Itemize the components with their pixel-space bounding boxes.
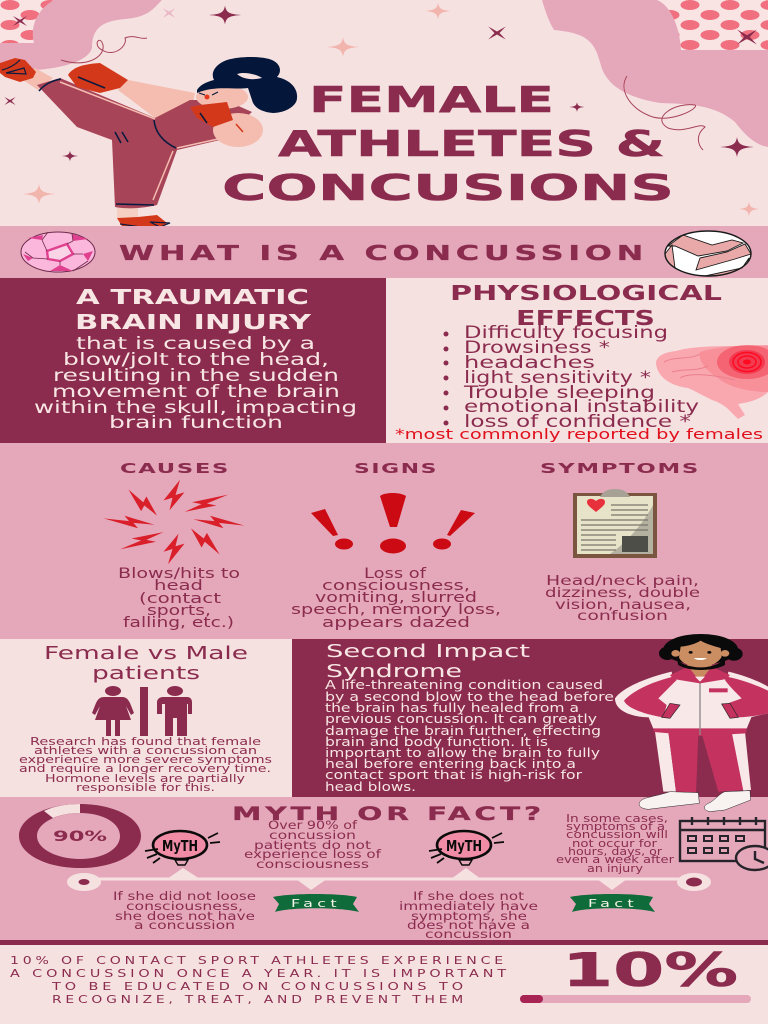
body text: responsible for this. xyxy=(76,781,215,794)
body text: important to allow the brain to fully xyxy=(325,746,600,760)
icon: volleyball xyxy=(665,231,751,276)
myth text 1: If she did not loose xyxy=(113,889,256,903)
body text: and require a longer recovery time. xyxy=(19,762,271,775)
body text: brain function xyxy=(109,413,283,433)
bullet list: Trouble sleeping xyxy=(463,383,655,402)
bullet list: emotional instability xyxy=(464,397,699,416)
heading: PHYSIOLOGICAL xyxy=(450,281,722,305)
body text xyxy=(325,678,614,794)
body text: by a second blow to the head before xyxy=(325,690,614,704)
fact banner 1: Fact xyxy=(291,897,341,910)
column: symptoms xyxy=(540,461,700,624)
bullet list: Drowsiness * xyxy=(464,338,610,357)
bullet list: loss of confidence * xyxy=(464,412,691,431)
text: symptoms: Head/neck pain, xyxy=(546,573,699,589)
heading xyxy=(450,281,722,330)
column: signs: SIGNS xyxy=(354,461,438,477)
myth text 2: does not have a xyxy=(407,918,530,932)
text: causes xyxy=(118,566,240,631)
statement text: RECOGNIZE, TREAT, AND PREVENT THEM xyxy=(52,993,467,1006)
heading: MYTH OR FACT? xyxy=(232,803,545,825)
text: causes: falling, etc.) xyxy=(123,615,234,631)
myth text 2 xyxy=(399,889,538,941)
body text xyxy=(34,334,357,433)
band: myth or fact xyxy=(0,797,768,941)
title: ATHLETES & xyxy=(278,124,665,165)
icon: calendar and clock xyxy=(680,817,768,870)
body text: Research has found that female xyxy=(30,735,261,748)
text: symptoms xyxy=(545,573,700,624)
text: signs: speech, memory loss, xyxy=(291,602,501,618)
heading xyxy=(44,643,248,684)
body text: Hormone levels are partially xyxy=(45,772,246,785)
chart: 90 percent donut: 90% xyxy=(53,829,107,845)
body text: resulting in the sudden xyxy=(53,366,339,386)
statement text: TO BE EDUCATED ON CONCUSSIONS TO xyxy=(51,980,467,993)
bullet list xyxy=(444,323,699,431)
panel: ten percent statistic xyxy=(0,943,768,1024)
icon: brain xyxy=(656,345,768,419)
fact text 1: concussion xyxy=(269,828,356,842)
text: causes: Blows/hits to xyxy=(118,566,240,582)
text: signs: Loss of xyxy=(364,566,427,582)
body text: brain and body function. It is xyxy=(325,735,548,749)
heading: Female vs Male xyxy=(44,643,248,664)
body text: blow/jolt to the head, xyxy=(63,350,329,370)
body text: movement of the brain xyxy=(52,382,340,402)
myth text 2: If she does not xyxy=(413,889,525,903)
fact banner 2 xyxy=(570,894,655,912)
icon: exclamation marks xyxy=(311,493,475,554)
progress bar xyxy=(520,995,751,1003)
fact text 2: hours, days, or xyxy=(568,846,663,858)
body text: A life-threatening condition caused xyxy=(325,678,603,692)
body text: head blows. xyxy=(325,780,416,794)
heading: A TRAUMATIC xyxy=(76,285,309,309)
body text: previous concussion. It can greatly xyxy=(325,712,597,726)
heading xyxy=(326,641,530,682)
heading: Second Impact xyxy=(326,641,530,662)
body text: experience more severe symptoms xyxy=(19,753,272,766)
fact text 2: In some cases, xyxy=(566,813,668,825)
fact text 1: Over 90% of xyxy=(268,818,358,832)
heading: patients xyxy=(92,663,200,684)
statement text xyxy=(10,954,510,1006)
text: signs: appears dazed xyxy=(322,615,470,631)
fact text 2: symptoms of a xyxy=(566,821,665,833)
icon: lightning burst xyxy=(104,480,245,564)
icon: soccer ball xyxy=(21,232,95,272)
title: FEMALE xyxy=(309,80,554,121)
illustration: kicking female boxer xyxy=(0,57,297,229)
title: CONCUSIONS xyxy=(222,168,674,209)
fact banner 1 xyxy=(273,894,359,912)
statement text: A CONCUSSION ONCE A YEAR. IT IS IMPORTANT xyxy=(10,967,510,980)
panel: causes, signs, symptoms xyxy=(0,443,768,639)
body text: the brain has fully healed from a xyxy=(325,701,579,715)
heading: WHAT IS A CONCUSSION xyxy=(119,241,648,265)
fact text 1: consciousness xyxy=(256,857,369,871)
myth text 2: concussion xyxy=(425,927,512,941)
column: symptoms: SYMPTOMS xyxy=(540,461,700,477)
body text: athletes with a concussion can xyxy=(34,744,257,757)
sparkle stars xyxy=(4,2,759,216)
bullet list: light sensitivity * xyxy=(464,368,651,387)
text: symptoms: confusion xyxy=(577,608,668,624)
myth text 2: symptoms, she xyxy=(411,909,527,923)
body text: contact sport that is high-risk for xyxy=(325,768,582,782)
text: causes: (contact xyxy=(139,591,222,607)
big number: 10% xyxy=(562,943,738,997)
icon: clipboard xyxy=(573,489,657,558)
bullet list: Difficulty focusing xyxy=(464,323,668,342)
illustration: athlete in tracksuit xyxy=(615,634,768,812)
myth text 1: consciousness, xyxy=(126,899,243,913)
fact text 1: patients do not xyxy=(254,838,372,852)
divider bar xyxy=(0,940,768,945)
heading xyxy=(75,285,312,334)
statement text: 10% OF CONTACT SPORT ATHLETES EXPERIENCE xyxy=(10,954,507,967)
text: causes: sports, xyxy=(147,603,211,619)
text: causes: head xyxy=(154,578,203,594)
icon: myth bubble 2: MyTH xyxy=(446,837,482,855)
text: signs: consciousness, xyxy=(322,578,470,594)
myth text 2: immediately have xyxy=(399,899,538,913)
myth text 1 xyxy=(113,889,256,932)
fact text 2: an injury xyxy=(587,863,643,875)
fact text 2: concussion will xyxy=(566,829,668,841)
band: what is a concussion xyxy=(0,226,768,278)
fact text 2 xyxy=(556,813,675,875)
timeline xyxy=(67,868,711,891)
panel: traumatic brain injury xyxy=(0,278,386,443)
bullet list: headaches xyxy=(464,353,595,372)
panel: physiological effects xyxy=(388,278,768,443)
panel: female vs male patients xyxy=(0,639,292,797)
myth text 1: a concussion xyxy=(134,918,235,932)
fact banner 2: Fact xyxy=(588,897,638,910)
column: causes xyxy=(104,461,245,631)
icon: myth bubble 1: MyTH xyxy=(162,837,198,855)
text: symptoms: vision, nausea, xyxy=(555,597,691,613)
body text: that is caused by a xyxy=(76,334,315,354)
fact text 1: experience loss of xyxy=(244,847,382,861)
column: signs xyxy=(291,461,501,631)
title xyxy=(222,80,674,209)
header background xyxy=(0,0,768,226)
myth text 1: she does not have xyxy=(115,909,255,923)
icon: female and male figures xyxy=(92,686,192,736)
fact text 1 xyxy=(244,818,382,871)
heading: Syndrome xyxy=(326,661,462,682)
icon: myth bubble 1 xyxy=(145,831,220,865)
heading: BRAIN INJURY xyxy=(75,310,312,334)
text: signs: vomiting, slurred xyxy=(315,590,477,606)
body text xyxy=(19,735,272,794)
icon: myth bubble 2 xyxy=(429,831,504,865)
chart: 90 percent donut xyxy=(19,804,141,868)
fact text 2: not occur for xyxy=(572,838,658,850)
panel: second impact syndrome xyxy=(292,639,768,797)
column: causes: CAUSES xyxy=(120,461,230,477)
heading: EFFECTS xyxy=(516,306,655,330)
body text: heal before entering back into a xyxy=(325,757,576,771)
body text: within the skull, impacting xyxy=(34,398,357,418)
text: symptoms: dizziness, double xyxy=(545,585,700,601)
fact text 2: even a week after xyxy=(556,854,675,866)
body text: damage the brain further, effecting xyxy=(325,724,601,738)
footnote: *most commonly reported by females xyxy=(395,427,763,443)
text: signs xyxy=(291,566,501,631)
